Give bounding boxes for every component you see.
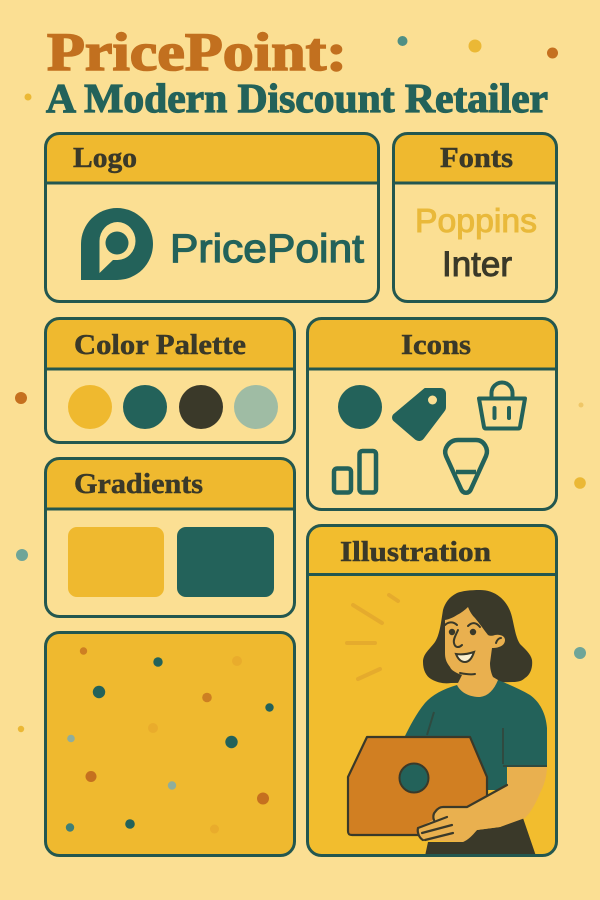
icon: price tag [393, 389, 445, 440]
panel: confetti pattern [46, 632, 294, 856]
arm and hand [418, 766, 547, 842]
sleeve seam lines [427, 712, 547, 766]
gradient swatch: teal [177, 527, 274, 597]
icon: cone [445, 440, 487, 493]
icon: PricePoint pin mark [81, 208, 153, 280]
panel: logo [45, 134, 379, 302]
color swatches [68, 385, 278, 429]
heading: icons: Icons [401, 330, 471, 361]
heading: color palette: Color Palette [74, 330, 246, 361]
illustration: woman holding a box [348, 590, 547, 856]
facial features [445, 622, 501, 674]
arm outline and fingers [418, 785, 507, 840]
background confetti dots [15, 36, 586, 732]
heading: gradients: Gradients [74, 469, 203, 500]
title [46, 22, 548, 121]
panel: fonts [393, 134, 557, 302]
illustration: sparkle rays [347, 595, 398, 679]
heading: fonts: Fonts [440, 143, 513, 174]
title: PricePoint: [47, 22, 347, 82]
heading: illustration: Illustration [340, 537, 491, 568]
font sample: Poppins: Poppins [415, 202, 537, 239]
hair [423, 590, 532, 683]
logo wordmark: PricePoint [170, 227, 364, 271]
panel: gradients [45, 458, 295, 616]
pants [425, 818, 536, 856]
icon: circle [338, 385, 382, 429]
panel: illustration [307, 526, 557, 856]
shirt [404, 680, 547, 790]
heading: logo: Logo [73, 143, 137, 174]
panel: icons [307, 318, 557, 510]
gradient swatch: yellow [68, 527, 164, 597]
neck and face [445, 607, 505, 697]
panel: color palette [45, 318, 295, 442]
icon: bar chart [334, 451, 376, 492]
font sample: Inter: Inter [442, 245, 512, 284]
title: A Modern Discount Retailer [46, 75, 548, 121]
box [348, 737, 487, 835]
icon: shopping basket [479, 383, 525, 429]
